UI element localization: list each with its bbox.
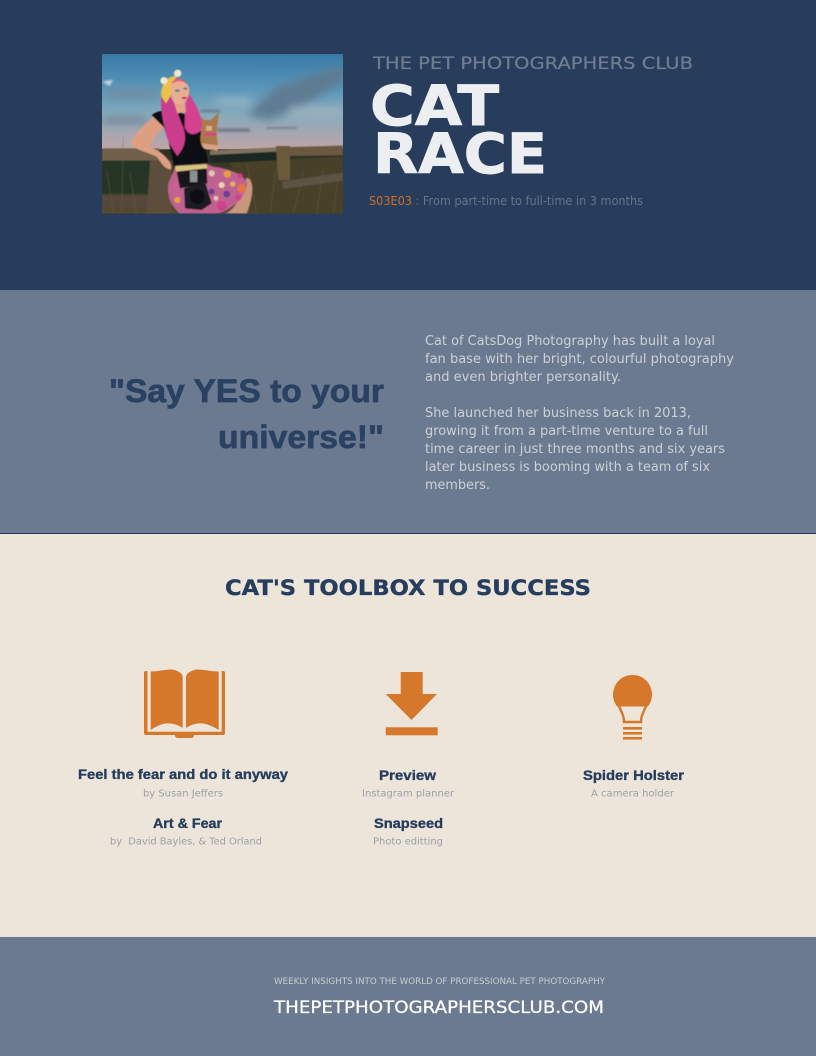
biography text: members. — [425, 478, 490, 493]
icon: open book — [144, 670, 225, 738]
arm — [131, 117, 171, 169]
biography text: Cat of CatsDog Photography has built a loyal — [425, 334, 715, 349]
biography text: growing it from a part-time venture to a full — [425, 424, 708, 439]
item: Feel the fear: by Susan Jeffers — [143, 788, 223, 800]
item: Snapseed: Photo editting — [373, 836, 443, 848]
footer tagline: WEEKLY INSIGHTS INTO THE WORLD OF PROFESSIONAL PET PHOTOGRAPHY — [274, 977, 605, 987]
item: Art and Fear: by David Bayles, & Ted Orland — [110, 836, 262, 848]
item: Feel the fear: Feel the fear and do it anyway — [78, 766, 288, 782]
camera — [177, 168, 207, 188]
title: CAT — [370, 74, 499, 139]
pull quote: "Say YES to your — [109, 373, 384, 409]
item: Feel the fear — [78, 766, 288, 800]
pull quote: universe!" — [218, 419, 384, 455]
black top — [152, 110, 209, 166]
item: Spider Holster: Spider Holster — [583, 767, 685, 783]
biography text — [425, 334, 734, 493]
skirt — [168, 164, 247, 214]
biography text: time career in just three months and six years — [425, 442, 725, 457]
leg — [225, 178, 252, 214]
header panel — [0, 0, 816, 290]
biography text: She launched her business back in 2013, — [425, 406, 691, 421]
icon: light bulb — [613, 675, 652, 740]
hair — [161, 95, 185, 156]
item: Spider Holster — [583, 767, 685, 800]
icon: download arrow — [386, 672, 438, 735]
pull quote — [109, 373, 384, 455]
episode subtitle: S03E03 : From part-time to full-time in 3 months — [369, 194, 643, 208]
biography text: later business is booming with a team of six — [425, 460, 710, 475]
title: RACE — [373, 122, 547, 187]
item: Spider Holster: A camera holder — [591, 788, 675, 800]
grass — [107, 137, 338, 214]
item: Preview — [362, 767, 455, 800]
item: Snapseed — [373, 815, 443, 848]
item: Art and Fear: Art & Fear — [153, 815, 223, 831]
footer panel — [0, 937, 816, 1056]
footer website: THEPETPHOTOGRAPHERSCLUB.COM — [273, 998, 604, 1017]
toolbox panel — [0, 534, 816, 937]
photo: photographer with dog on a fence — [102, 54, 343, 214]
face — [171, 81, 189, 106]
item: Snapseed: Snapseed — [374, 815, 443, 831]
title — [370, 74, 547, 187]
biography text: fan base with her bright, colourful photography — [425, 352, 734, 367]
toolbox heading: CAT'S TOOLBOX TO SUCCESS — [225, 576, 591, 600]
item: Preview: Preview — [379, 767, 436, 783]
dog — [198, 113, 219, 149]
quote panel — [0, 290, 816, 534]
item: Preview: Instagram planner — [362, 788, 455, 800]
item: Art and Fear — [110, 815, 262, 848]
biography text: and even brighter personality. — [425, 370, 621, 385]
series name: THE PET PHOTOGRAPHERS CLUB — [372, 54, 693, 73]
